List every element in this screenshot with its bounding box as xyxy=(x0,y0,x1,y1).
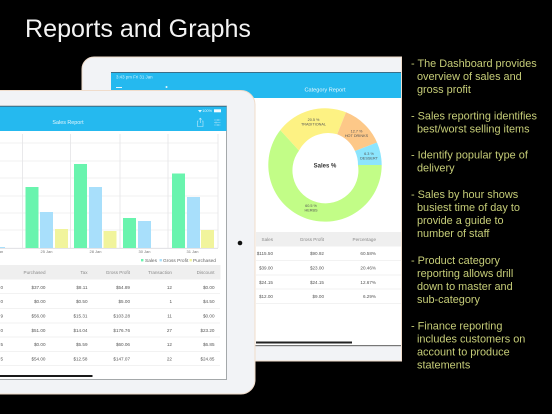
item: delivery: - Identify popular type of xyxy=(411,150,528,162)
sales table: $147.07 xyxy=(113,356,130,362)
home button xyxy=(238,241,242,245)
segment: dessert xyxy=(355,142,382,165)
label: herbs: HERBS xyxy=(304,208,318,212)
item: finance: statements xyxy=(417,360,471,372)
legend xyxy=(141,258,216,264)
sales table: $37.00 xyxy=(31,285,46,290)
label: hot drinks: HOT DRINKS xyxy=(345,134,369,138)
sales table: $24.85 xyxy=(200,356,215,362)
bars: day 1 xyxy=(26,187,68,248)
sales table: $0.00 xyxy=(34,299,46,304)
sales table: $5.59 xyxy=(76,342,88,347)
category table: $24.15 xyxy=(310,280,324,285)
sales table: $0.50 xyxy=(76,299,88,304)
segment: herbs xyxy=(268,130,382,222)
item: dashboard: overview of sales and xyxy=(417,71,522,83)
bars: day 3 xyxy=(123,218,151,248)
sales table: $0.00 xyxy=(203,285,215,290)
screen bottom edge xyxy=(255,345,401,346)
sales table: $103.28 xyxy=(113,314,130,318)
item: delivery: delivery xyxy=(417,162,455,174)
sales table: $0.00 xyxy=(34,342,46,347)
sales table: $54.00 xyxy=(31,356,46,362)
bars: day 2 xyxy=(74,164,116,248)
item: sales reporting: best/worst selling items xyxy=(417,124,530,136)
axis labels: 28 Jan xyxy=(89,249,102,254)
legend: Sales xyxy=(145,258,158,264)
category table: Gross Profit xyxy=(300,237,325,242)
label: dessert: DESSERT xyxy=(360,156,379,160)
scroll bar xyxy=(256,342,352,344)
category table: 60.58% xyxy=(360,251,376,256)
category table: 20.46% xyxy=(360,266,376,270)
donut chart xyxy=(268,108,382,222)
feature list xyxy=(411,58,537,372)
header bar: Category Report xyxy=(304,88,346,94)
sales table: 0 xyxy=(0,285,3,290)
label: traditional: TRADITIONAL xyxy=(301,122,326,126)
sales table: 12 xyxy=(167,342,172,347)
sales table: $60.06 xyxy=(116,342,130,347)
header bar xyxy=(0,106,226,131)
sales table: 0 xyxy=(0,328,3,333)
item: sales by hour: provide a guide to xyxy=(417,215,504,227)
item: dashboard: gross profit xyxy=(417,84,471,96)
icon: filter xyxy=(214,119,220,126)
axis labels: 30 Jan xyxy=(138,249,151,254)
sales table: $8.11 xyxy=(76,285,88,290)
item: sales by hour: - Sales by hour shows xyxy=(411,189,518,201)
item: sales reporting: - Sales reporting identifies xyxy=(411,110,537,122)
bars: day 4 xyxy=(172,174,214,248)
segment: traditional xyxy=(280,108,346,151)
header bar: 3:43 pm Fri 31 Jan xyxy=(116,74,153,80)
tablet: sales report xyxy=(0,90,255,394)
header bar xyxy=(111,72,401,98)
sales table: 12 xyxy=(167,285,172,290)
sales table: $23.20 xyxy=(200,328,215,333)
scroll bar xyxy=(0,375,92,377)
tablet body xyxy=(0,90,255,394)
legend: Gross Profit xyxy=(163,258,189,264)
sales table: $4.50 xyxy=(203,299,215,304)
icon: wifi xyxy=(198,110,202,112)
category table: $12.00 xyxy=(259,294,273,299)
sales table: Gross Profit xyxy=(106,270,131,275)
centre label: Sales % xyxy=(314,164,337,170)
tablet: category report xyxy=(82,57,402,361)
category table: Percentage xyxy=(352,237,376,242)
category table: $9.00 xyxy=(312,294,324,299)
sales table: $15.31 xyxy=(73,314,88,318)
sales table: 22 xyxy=(167,356,172,362)
sales table: 1 xyxy=(169,299,172,304)
label: dessert: 6.3 % xyxy=(364,152,374,156)
sales table: $6.85 xyxy=(203,342,215,347)
category table: Sales xyxy=(262,237,274,242)
sales table: Purchased xyxy=(24,270,46,275)
category table: $115.50 xyxy=(257,251,273,256)
sales table: Discount xyxy=(197,270,215,275)
item: product category: down to master and xyxy=(417,281,513,293)
sales table: 11 xyxy=(167,314,172,318)
sales table: $12.58 xyxy=(73,356,88,362)
sales table: 5 xyxy=(0,356,3,362)
header bar: Sales Report xyxy=(52,120,84,126)
category table: $23.00 xyxy=(310,266,324,270)
label: hot drinks: 12.7 % xyxy=(351,130,362,134)
sales table: Transaction xyxy=(148,270,172,275)
sales table: 27 xyxy=(167,328,172,333)
bars: day 0 xyxy=(0,247,5,248)
segment: hot drinks xyxy=(337,112,377,151)
item: product category: reporting allows drill xyxy=(417,268,513,280)
icon: share xyxy=(198,118,203,126)
category table xyxy=(256,232,401,304)
axis labels: 31 Jan xyxy=(186,249,199,254)
label: herbs: 60.5 % xyxy=(305,204,317,208)
axis labels: 25 Jan xyxy=(40,249,53,254)
item: sales by hour: busiest time of day to xyxy=(417,202,520,214)
item: finance: account to produce xyxy=(417,346,510,358)
item: sales by hour: number of staff xyxy=(417,228,490,240)
legend: Purchased xyxy=(193,258,216,264)
title: Reports and Graphs xyxy=(25,15,251,43)
sales table: $54.89 xyxy=(116,285,130,290)
item: product category: - Product category xyxy=(411,255,500,267)
item: dashboard: - The Dashboard provides xyxy=(411,58,537,70)
item: finance: includes customers on xyxy=(417,334,525,346)
header bar: 100% xyxy=(202,109,213,113)
sales table: $176.76 xyxy=(113,328,130,333)
category table: $90.92 xyxy=(310,251,324,256)
category table: 12.67% xyxy=(360,280,376,285)
sales table xyxy=(0,265,220,366)
category table: $39.00 xyxy=(259,266,273,270)
icon: battery xyxy=(214,109,221,112)
sales table: $0.00 xyxy=(203,314,215,318)
sales table: 0 xyxy=(0,299,3,304)
sales table: $5.00 xyxy=(118,299,130,304)
tablet body xyxy=(82,57,402,361)
screen xyxy=(111,72,401,346)
item: finance: - Finance reporting xyxy=(411,320,502,332)
sales table: $56.00 xyxy=(31,314,46,318)
category table: $24.15 xyxy=(259,280,273,285)
item: product category: sub-category xyxy=(417,294,481,306)
bar chart xyxy=(0,134,218,264)
sales table: 9 xyxy=(0,314,3,318)
sales table: Tax xyxy=(80,270,88,275)
sales table: $51.00 xyxy=(31,328,46,333)
sales table: 5 xyxy=(0,342,3,347)
screen xyxy=(0,106,226,380)
sales table: $14.04 xyxy=(73,328,88,333)
category table: 6.29% xyxy=(363,294,376,299)
label: traditional: 20.5 % xyxy=(308,118,319,122)
axis labels xyxy=(0,249,199,254)
